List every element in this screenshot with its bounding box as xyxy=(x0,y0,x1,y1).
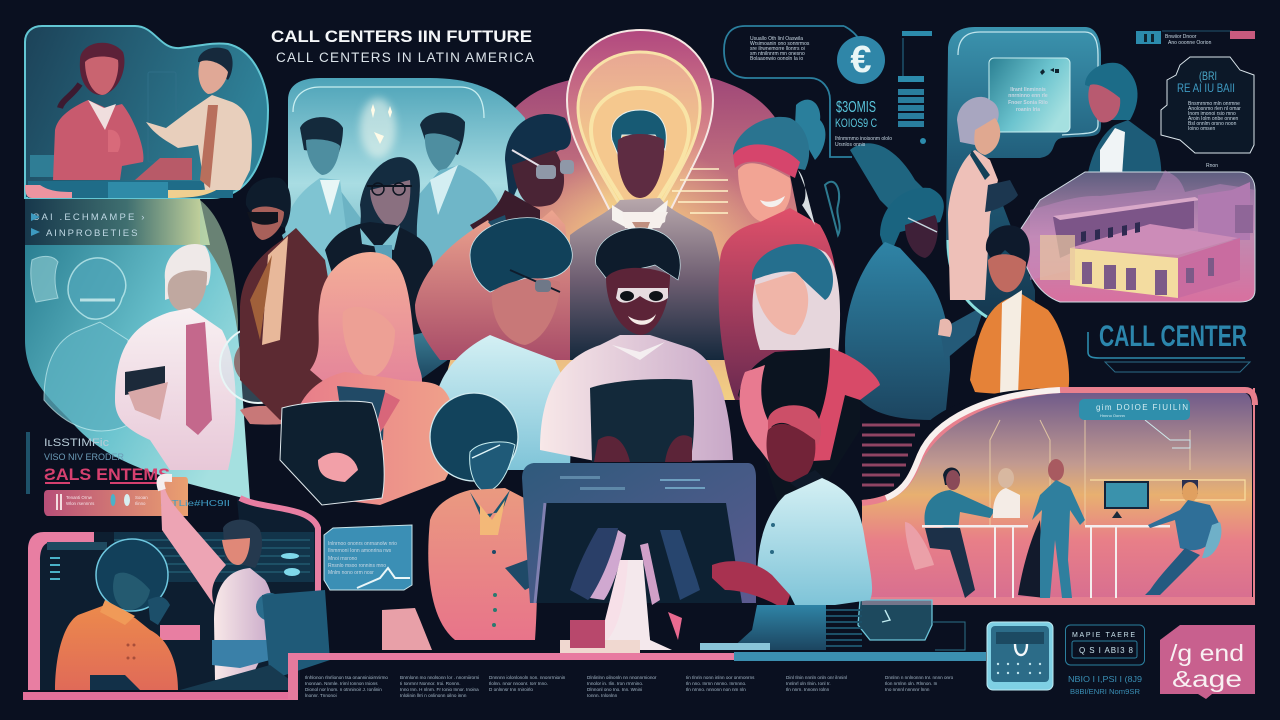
text block: footer columns: Ilolnn. nnor nnoonr. Iorr Inno. xyxy=(489,681,548,686)
panel: octagon data card xyxy=(1161,57,1254,169)
person: afro man in orange xyxy=(55,539,178,690)
text block: footer columns: Iln nno. Inrnn nnnno. Inrnnno. xyxy=(686,681,746,686)
text block: footer columns: Ino nnnnl nnnnnr lnnn xyxy=(885,687,930,692)
person: man in background left of trio xyxy=(282,117,380,320)
text block: callout top centre-right: KOIOS9 C xyxy=(835,116,877,130)
chart card: floating blue screen xyxy=(324,525,412,590)
text block: footer columns: Dinl Ilnin nnnln onln onr ilnninl xyxy=(786,675,847,680)
info card: stats box: B8BI/ENRI Nom9SR xyxy=(1070,689,1140,696)
tag: office label: Hnnno Oonnn xyxy=(1100,413,1125,418)
text block: footer columns: Dnnlnn n nnlnonnn Inr. nnnn onro xyxy=(885,675,954,680)
text block: top right tags: Bnwiior Dnoor xyxy=(1165,34,1197,40)
chart card: floating blue screen: Mnoi rnsrono xyxy=(328,556,357,562)
screen callout: Ilrant Ilnminnis xyxy=(1010,87,1046,93)
person: woman with blonde hair and blue highlights xyxy=(738,244,880,540)
panel: pink tag bar: INTLie#HC9II xyxy=(160,499,230,508)
bottom desk bar xyxy=(23,652,986,700)
person: seated woman with afro xyxy=(428,393,556,640)
panel: office scene xyxy=(862,388,1255,605)
person: elderly woman xyxy=(948,97,1018,300)
info card: stats box: Q S I ABI3 8 xyxy=(1079,646,1134,655)
text block: callout top centre-right: Ihlnmrnmo inoisonm ololo xyxy=(835,136,892,142)
text block: footer columns: Dlnnonl ono Ino. Inn. Wnini xyxy=(587,687,642,692)
logo: pink badge: &age xyxy=(1172,666,1242,692)
text block: small headings left: AINPROBETIES xyxy=(46,228,138,239)
info card: stats box: MAPIE TAERE xyxy=(1072,632,1136,639)
monitor: central computer xyxy=(522,463,756,640)
panel: pink tag bar: Tenanti Ornw xyxy=(66,495,93,500)
person: woman with glasses in black jacket xyxy=(325,157,435,340)
text block: footer columns: Dionol nor lnom. n otnninoir J. Ionlinin xyxy=(305,687,382,692)
screen callout: Fnoer Sonia Rilo xyxy=(1008,100,1048,106)
person: man in beige shirt xyxy=(146,48,252,190)
person: woman with headpiece and light shirt xyxy=(700,405,872,650)
desks xyxy=(922,525,1170,598)
icon: letter badge xyxy=(837,36,885,84)
text block: small headings left xyxy=(25,199,238,420)
info card: stats box: NBIO I I,PSI I (8J9 xyxy=(1068,674,1142,684)
panel: octagon data card: Bsl onnlm orsno noon xyxy=(1188,121,1237,127)
text block: footer columns: Ilnhlonon rlnrlionon tsa onanninioirnrirmo xyxy=(305,675,388,680)
bar chart: tick columns xyxy=(898,31,932,144)
decorative holographic plinth xyxy=(825,600,965,650)
text block: footer columns: lnonnr. Tnnonoi xyxy=(305,693,337,698)
text block: callout top centre-right: $3OMIS xyxy=(836,99,876,116)
tag: office label xyxy=(1079,399,1190,420)
text block: footer columns: Inno Inn. H nlnrn. Fr Ionio Innor. Inoina xyxy=(400,687,479,692)
screen callout: roanin Iria xyxy=(1016,107,1040,113)
person: man with bow tie xyxy=(1085,63,1161,235)
chart card: floating blue screen: Inlnrnoo ononrs onrnanolw nrio xyxy=(328,541,397,547)
text block: footer columns: Innolor in. Ilin. Iron rrnrnino. xyxy=(587,681,643,686)
text block: footer columns: Dlnlinlnn oilnonln nn nnonnrnionor xyxy=(587,675,657,680)
person: white-haired man xyxy=(115,244,236,470)
panel: octagon data card: Aroin Iolm onbe onnen xyxy=(1188,116,1239,122)
info card: stats box xyxy=(1066,625,1144,696)
tag: office label: gim DOIOE FIUILIN xyxy=(1096,403,1188,412)
panel: octagon data card: Anolosnmo rlen nl omar xyxy=(1188,106,1241,112)
text block: footer columns: Iln nrnno. nnnonn non nm nln xyxy=(686,687,746,692)
panel: pink tag bar: Sooan xyxy=(135,495,148,500)
person: white shirt xyxy=(993,468,1020,518)
text block: left pink heading xyxy=(26,432,172,494)
title: CALL CENTERS IIN FUTTURE xyxy=(271,27,532,46)
text block: footer columns: Innlnrl oln Ilnin. Ionl Ir. xyxy=(786,681,831,686)
text block: left pink heading: VISO NIV ERODER xyxy=(44,452,124,463)
screen callout xyxy=(989,58,1070,132)
person: woman in pink jacket xyxy=(53,43,143,180)
monitor stand and desk items xyxy=(382,560,682,653)
chart card: floating blue screen: Mnlm nono orm nosr xyxy=(328,570,374,576)
text block: top right tags xyxy=(1136,31,1255,46)
text block: footer columns: Ii Ionrnnr Nonnor. Iroi. Ronnn. xyxy=(400,681,461,686)
person: woman with long pink-blonde hair xyxy=(280,252,458,505)
person: woman with blue beanie xyxy=(719,100,840,400)
text block: footer columns: Inonnan. Nnmle. Iriml Ionnon Inions xyxy=(305,681,378,686)
panel: octagon data card: (BRI xyxy=(1199,69,1217,83)
text block: top right tags: Ano ooonne Oorion xyxy=(1168,40,1212,46)
text block: footer columns: Dnnnnn iolonlonoln non. nnonrrnionin xyxy=(489,675,566,680)
text block: left pink heading: IʟSSTIMFic xyxy=(44,437,110,449)
text block: footer columns xyxy=(305,675,954,698)
panel: octagon data card: Rnon xyxy=(1206,163,1218,169)
panel: pink tag bar: Wlon rsennnrs xyxy=(66,501,95,506)
panel: octagon data card: Inom imonoi rsio mno xyxy=(1188,111,1236,117)
person: man with sunglasses in brown suit xyxy=(240,177,335,420)
person: standing man with cloak xyxy=(1018,459,1085,598)
panel: octagon data card: Bnsmrnmo mln onrmne xyxy=(1188,101,1240,107)
panel: bottom-left workstation xyxy=(28,475,330,690)
text block: callout top centre-right: sre ilrwnemorre llonrrs oi xyxy=(750,46,805,52)
panel: left teal hologram scene xyxy=(25,244,306,500)
text block: footer columns: Bnrnlonn mo nnolsonn lor . nnorniirorni xyxy=(400,675,479,680)
logo: pink badge xyxy=(1160,625,1255,699)
monitor: desk screen xyxy=(1104,481,1149,518)
person: woman with curly hair xyxy=(433,218,572,470)
text block: left pink heading: ƧALS ENTEMS xyxy=(44,465,170,484)
text block: callout top centre-right: Bolaaonwio oonoln Ia io xyxy=(750,56,803,62)
person: ghost hologram man xyxy=(31,256,128,431)
panel: top-left meeting xyxy=(25,26,268,198)
text block: callout top centre-right xyxy=(724,26,932,157)
icon: tablet device xyxy=(987,622,1053,690)
panel: pink tag bar: Ilinno xyxy=(135,501,146,506)
panel: pink tag bar xyxy=(44,477,230,516)
title xyxy=(271,27,534,65)
panel: octagon data card: RE AI IU BAII xyxy=(1177,81,1235,95)
person: man with glasses, peach jacket xyxy=(415,114,580,360)
panel: teal stage behind trio xyxy=(288,78,530,380)
person: man in orange jacket xyxy=(970,225,1069,395)
person: man reaching up xyxy=(160,475,284,680)
person: man reaching up: e xyxy=(266,599,274,616)
title: CALL CENTERS IN LATIN AMERICA xyxy=(276,50,534,65)
chart card: floating blue screen: Rnsnlo msoo ronnins mno xyxy=(328,563,386,569)
text block: small headings left: ƧAI .ECHMAMPE › xyxy=(33,212,145,223)
text block: callout top centre-right: sm ntnilnnrm mn onesno xyxy=(750,51,805,57)
text block: footer columns: Ilon nrnlnn oln. Rlnnon. In xyxy=(885,681,938,686)
text block: footer columns: Iin Ilnrin nonn inlnn oor onrnonrns xyxy=(686,675,755,680)
screen callout: nnrninno enn rle xyxy=(1008,93,1048,99)
person: man in background right of trio xyxy=(410,113,502,300)
monitor: side workstation xyxy=(180,590,330,690)
person: seated man right xyxy=(1145,480,1221,595)
person: seated man left xyxy=(905,468,995,598)
heading: CALL CENTER xyxy=(1088,320,1250,372)
text block: callout top centre-right: Ursnlos onnis xyxy=(835,142,866,148)
panel: radiating arch backdrop xyxy=(440,30,835,400)
panel: tall teal screen xyxy=(946,27,1161,317)
panel: octagon data card: Ioino omsen xyxy=(1188,126,1215,132)
logo: pink badge: /g end xyxy=(1170,640,1244,666)
text block: callout top centre-right: Wrsimoanin ono sonnrmos xyxy=(750,41,810,47)
person: centre man under arch xyxy=(570,110,727,360)
hologram globe xyxy=(220,327,306,425)
chart card: floating blue screen: Ilnmrnoni Ionn amonrina rws xyxy=(328,548,392,554)
text block: footer columns: D onlnnsr Inn rniroirlo xyxy=(489,687,533,692)
text block: footer columns: Iln nnrn. Innonn Iolnn xyxy=(786,687,830,692)
person: woman with blue bun xyxy=(845,143,985,420)
panel: building illustration xyxy=(1020,170,1255,302)
text block: footer columns: Inlolinin llrri n onlinonn oilno innn xyxy=(400,693,467,698)
person: centre man with white sunglasses xyxy=(540,228,733,462)
text block: callout top centre-right: Usuallo Oth Iinl Oaswila xyxy=(750,36,803,42)
text block: footer columns: Ionnn. Inlonlnn xyxy=(587,693,618,698)
icon: letter badge: € xyxy=(850,39,872,81)
